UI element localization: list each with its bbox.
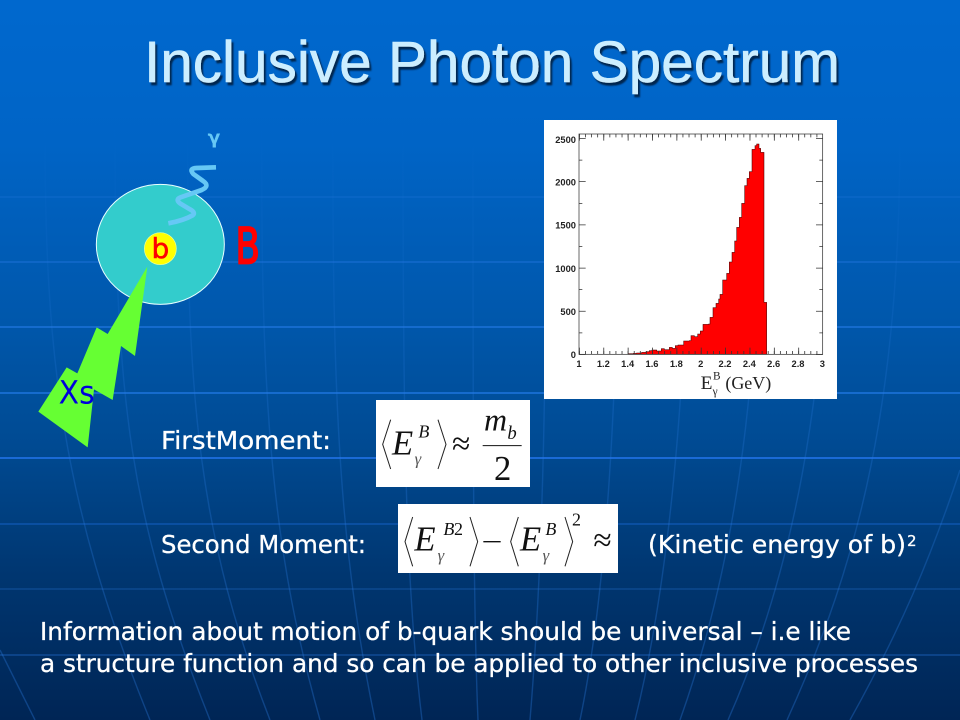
y axis labels: 2500 bbox=[555, 135, 576, 145]
b quark: b bbox=[151, 232, 169, 265]
x axis title: B bbox=[713, 371, 721, 383]
formula: second moment: B bbox=[443, 519, 454, 539]
x axis labels bbox=[576, 359, 825, 369]
y axis labels: 500 bbox=[560, 307, 576, 317]
x axis title: (GeV) bbox=[725, 373, 771, 394]
text: conclusion bbox=[40, 617, 918, 678]
x axis labels: 1 bbox=[576, 359, 582, 369]
x axis title bbox=[701, 371, 771, 398]
formula: second moment: ≈ bbox=[593, 522, 612, 559]
formula: first moment: 2 bbox=[494, 450, 511, 488]
x axis labels: 2.2 bbox=[719, 359, 731, 369]
y axis labels: 2000 bbox=[555, 177, 576, 187]
b quark bbox=[144, 232, 176, 265]
formula: first moment: E bbox=[391, 424, 413, 462]
formula: second moment: γ bbox=[543, 546, 550, 565]
x axis labels: 2.6 bbox=[767, 359, 780, 369]
x axis labels: 2.8 bbox=[792, 359, 804, 369]
x axis labels: 1.4 bbox=[621, 359, 635, 369]
formula: second moment: 2 bbox=[454, 519, 463, 539]
formula: second moment: E bbox=[519, 520, 541, 558]
formula: first moment: B bbox=[418, 422, 429, 442]
icon: Xs jet arrow bbox=[38, 267, 147, 447]
x axis labels: 1.2 bbox=[597, 359, 610, 369]
y axis labels: 0 bbox=[571, 350, 576, 360]
diagram: B meson decay bbox=[38, 127, 260, 447]
x axis title: γ bbox=[712, 386, 718, 398]
formula: first moment bbox=[376, 400, 530, 488]
axes and ticks bbox=[579, 134, 823, 354]
formula: second moment: 2 bbox=[572, 510, 581, 530]
Xs label: Xs bbox=[59, 373, 95, 411]
text: conclusion: a structure function and so can be applied to other inclusive processes bbox=[40, 649, 918, 678]
formula: first moment: γ bbox=[415, 449, 422, 468]
x axis labels: 2 bbox=[698, 359, 703, 369]
x axis title: E bbox=[701, 373, 712, 394]
formula: second moment: B bbox=[545, 519, 556, 539]
label: second moment: Second Moment: bbox=[161, 530, 366, 559]
B meson circle bbox=[96, 184, 224, 304]
formula: first moment: m bbox=[484, 401, 507, 437]
B label: B bbox=[235, 217, 260, 275]
x axis labels: 3 bbox=[820, 359, 825, 369]
label: first moment: FirstMoment: bbox=[161, 426, 331, 455]
title: Inclusive Photon Spectrum bbox=[144, 30, 840, 95]
histogram bars bbox=[628, 144, 767, 354]
label: kinetic energy: (Kinetic energy of b) bbox=[648, 530, 906, 559]
photon label: γ bbox=[208, 127, 221, 148]
chart: photon energy histogram bbox=[544, 120, 837, 399]
x axis labels: 1.8 bbox=[670, 359, 683, 369]
formula: second moment: E bbox=[413, 520, 436, 558]
formula: first moment: ≈ bbox=[452, 425, 470, 462]
label: kinetic energy: 2 bbox=[907, 532, 917, 550]
y axis labels bbox=[555, 135, 576, 360]
formula: second moment bbox=[398, 504, 618, 573]
text: conclusion: Information about motion of b-quark should be universal – i.e like bbox=[40, 617, 851, 646]
formula: first moment: b bbox=[507, 423, 517, 444]
x axis labels: 1.6 bbox=[646, 359, 658, 369]
y axis labels: 1000 bbox=[555, 264, 576, 274]
icon: photon wavy line bbox=[168, 167, 216, 223]
formula: second moment: γ bbox=[438, 546, 445, 565]
x axis labels: 2.4 bbox=[743, 359, 757, 369]
y axis labels: 1500 bbox=[555, 221, 576, 231]
